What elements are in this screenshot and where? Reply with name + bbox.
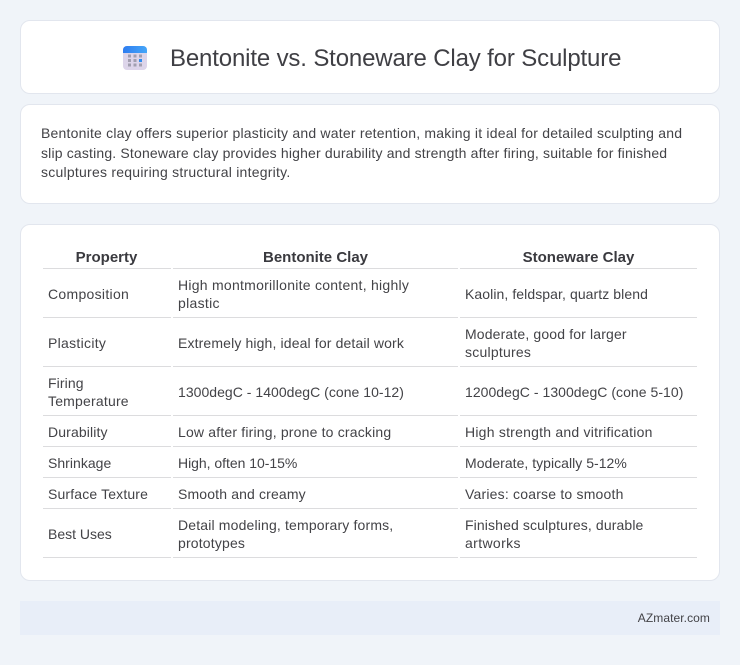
row: shrinkage: High, often 10-15% [178,455,297,471]
intro text: Bentonite clay offers superior plasticity and water retention, making it ideal for detailed sculpting and [41,125,682,141]
row: plasticity [48,326,627,360]
column headings: Bentonite Clay [263,249,368,266]
row: best uses: Finished sculptures, durable [465,517,643,533]
row: durability [48,424,653,440]
row: composition: plastic [178,295,220,311]
intro text: slip casting. Stoneware clay provides higher durability and strength after firing, suitable for finished [41,144,667,160]
row: firing temperature: 1300degC - 1400degC (cone 10-12) [178,384,404,400]
intro text: sculptures requiring structural integrity. [41,164,290,180]
row: surface texture [48,486,624,502]
row: best uses [48,517,643,551]
row: composition: Kaolin, feldspar, quartz blend [465,286,648,302]
row: best uses: artworks [465,535,521,551]
intro text panel [20,104,720,204]
footer bar [20,601,720,635]
row: durability: Low after firing, prone to cracking [178,424,391,440]
column headings: Stoneware Clay [523,249,634,266]
column headings: Property [76,249,137,266]
row: plasticity: Moderate, good for larger [465,326,627,342]
row: firing temperature: Firing [48,375,84,391]
row: shrinkage: Moderate, typically 5-12% [465,455,627,471]
row: surface texture: Varies: coarse to smooth [465,486,624,502]
header card [20,20,720,94]
row: shrinkage [48,455,627,471]
row: composition: Composition [48,286,129,302]
row: best uses: Detail modeling, temporary forms, [178,517,393,533]
footer source text: AZmater.com [638,611,710,625]
row: composition [48,277,648,311]
row: plasticity: sculptures [465,344,531,360]
row: shrinkage: Shrinkage [48,455,111,471]
row: plasticity: Plasticity [48,335,106,351]
row: surface texture: Smooth and creamy [178,486,306,502]
row: best uses: prototypes [178,535,245,551]
row: firing temperature: Temperature [48,393,129,409]
comparison table panel [20,224,720,581]
row: composition: High montmorillonite content, highly [178,277,409,293]
row: plasticity: Extremely high, ideal for detail work [178,335,404,351]
title: Bentonite vs. Stoneware Clay for Sculpture [170,45,621,72]
row: durability: Durability [48,424,108,440]
row: firing temperature [48,375,683,409]
row: firing temperature: 1200degC - 1300degC (cone 5-10) [465,384,683,400]
row: surface texture: Surface Texture [48,486,148,502]
icon: calendar [123,46,147,70]
row: durability: High strength and vitrification [465,424,653,440]
column headings [76,249,634,266]
row: best uses: Best Uses [48,526,112,542]
intro text [41,125,682,180]
